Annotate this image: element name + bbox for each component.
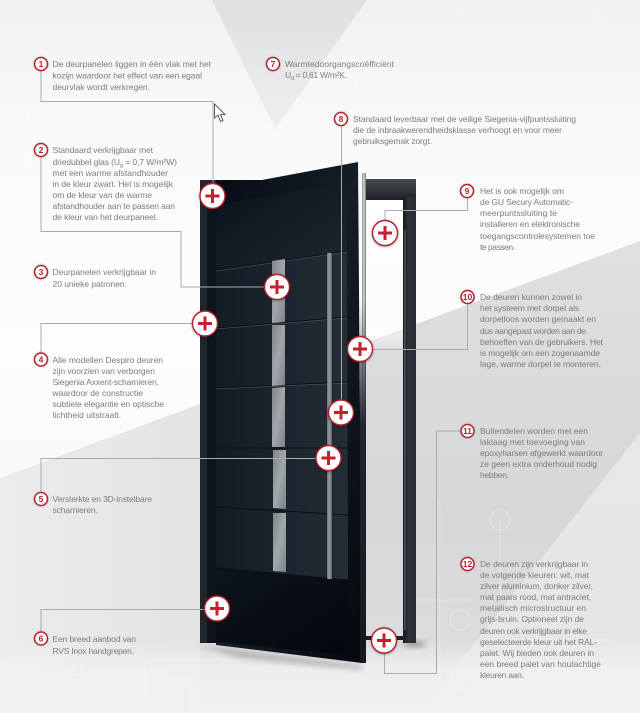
callout 4: Alle modellen Despiro deuren: [52, 355, 163, 365]
callout 12: 12: [463, 559, 472, 569]
plus marker 1: [200, 184, 225, 208]
callout 4: [34, 353, 164, 420]
callout 5: [34, 492, 152, 515]
callout 2: [34, 144, 177, 222]
callout 6: Een breed aanbod van: [52, 634, 136, 644]
glass strips: [272, 259, 286, 572]
callout 4: 4: [39, 354, 44, 364]
door handle: [327, 253, 332, 579]
callout 10: dorpelloos worden gemaakt en: [480, 314, 596, 324]
callout 4: zijn voorzien van verborgen: [52, 366, 155, 376]
callout 7: 7: [271, 59, 276, 69]
callout 8: die de inbraakwerendheidsklasse verhoogt en voor meer: [353, 125, 562, 135]
mouse cursor: [214, 104, 225, 122]
callout 12: deuren ook verkrijgbaar in elke: [480, 626, 587, 636]
callout 7: U: [285, 70, 291, 80]
callout 2: driedubbel glas (U: [52, 157, 120, 167]
callout 9: Het is ook mogelijk om: [480, 186, 564, 196]
callout 10: [461, 290, 604, 369]
callout 4: waardoor de constructie: [52, 388, 143, 398]
callout 2: afstandhouder aan te passen aan: [52, 201, 175, 211]
callout 11: 11: [463, 426, 472, 436]
callout 10: 10: [463, 292, 472, 302]
callout 12: palet. Wij bieden ook deuren in: [480, 648, 594, 658]
callout 3: [34, 266, 156, 289]
callout 1: deurvlak wordt verkregen.: [52, 82, 150, 92]
callout 1: [34, 58, 212, 92]
plus marker 5: [348, 336, 372, 362]
callout 12: mat paars rood, mat antraciet,: [480, 592, 591, 602]
callout 10: lage, warme dorpel te monteren.: [480, 359, 601, 369]
callout 4: lichtheid uitstraalt.: [52, 410, 121, 420]
callout 8: [334, 112, 576, 146]
top door panel: [216, 182, 347, 270]
callout 2: Standaard verkrijgbaar met: [52, 145, 154, 155]
callout 5: Versterkte en 3D-instelbare: [52, 494, 152, 504]
callout 7: d: [291, 76, 294, 82]
callout 12: geselecteerde kleur uit het RAL-: [480, 637, 597, 647]
callout 6: RVS Inox handgrepen.: [52, 646, 134, 656]
callout 12: [461, 558, 601, 680]
callout 5: scharnieren.: [52, 505, 98, 515]
callout 4: Siegenia Axxent-scharnieren,: [52, 377, 159, 387]
callout 3: Deurpanelen verkrijgbaar in: [52, 267, 156, 277]
callout 12: De deuren zijn verkrijgbaar in: [480, 559, 588, 569]
callout 8: gebruiksgemak zorgt.: [353, 136, 432, 146]
callout 9: de GU Secury Automatic-: [480, 197, 573, 207]
callout 8: Standaard leverbaar met de veilige Siegenia-vijfpuntssluiting: [353, 114, 576, 124]
connector lines: [41, 64, 468, 674]
callout 6: [34, 632, 136, 656]
callout 5: 5: [39, 494, 44, 504]
callout 9: installeren en elektronische: [480, 219, 580, 229]
floor shadow: [196, 645, 362, 670]
callout 1: 1: [39, 59, 44, 69]
callout 10: dus aangepast worden aan de: [480, 326, 586, 336]
callout 2: in de kleur zwart. Het is mogelijk: [52, 179, 174, 189]
callout 9: [460, 184, 595, 252]
callout 7: = 0,61 W/m²K.: [294, 70, 347, 80]
callout 11: Buitendelen worden met een: [480, 426, 588, 436]
callout 9: toegangscontrolesystemen toe: [480, 231, 595, 241]
plus marker 9: [372, 628, 396, 653]
callout 2: de kleur van het deurpaneel.: [52, 212, 158, 222]
plus marker 8: [204, 596, 230, 621]
callout 1: De deurpanelen liggen in één vlak met het: [52, 59, 212, 69]
callout 10: het systeem met dorpel als: [480, 303, 579, 313]
door frame: [362, 179, 426, 646]
callout 10: behoeften van de gebruikers. Het: [480, 337, 604, 347]
door grooves: [216, 251, 348, 580]
callout 9: 9: [465, 186, 470, 196]
plus marker 2: [264, 274, 290, 300]
callout 11: epoxyharsen afgewerkt waardoor: [480, 448, 603, 458]
callout 2: g: [120, 163, 123, 169]
callout 12: zilver aluminium, donker zilver,: [480, 581, 593, 591]
callout 12: een breed palet van houtachtige: [480, 659, 601, 669]
callout 11: laklaag met toevoeging van: [480, 437, 585, 447]
callout 11: [461, 424, 603, 480]
callout 9: te passen.: [480, 242, 515, 252]
plus marker 7: [316, 446, 341, 470]
bottom door panel: [216, 568, 349, 655]
callout 2: om de kleur van de warme: [52, 190, 152, 200]
callout 2: met een warme afstandhouder: [52, 168, 168, 178]
callout 12: kleuren aan.: [480, 670, 524, 680]
callout 11: hebben.: [480, 470, 509, 480]
callout 10: De deuren kunnen zowel in: [480, 292, 582, 302]
callout 1: kozijn waardoor het effect van een egaal: [52, 70, 202, 80]
plus marker 4: [372, 220, 398, 246]
callout 7: [266, 58, 395, 82]
plus marker 3: [192, 311, 218, 336]
callout 2: = 0,7 W/m²W): [123, 157, 177, 167]
callout 4: subtiele elegantie en optische: [52, 399, 164, 409]
callout 6: 6: [39, 634, 44, 644]
callout 10: is mogelijk om een zogenaamde: [480, 348, 600, 358]
callout 2: 2: [39, 145, 44, 155]
door leaf: [200, 162, 366, 663]
middle door panels: [216, 251, 348, 580]
callout 11: ze geen extra onderhoud nodig: [480, 459, 597, 469]
callout 12: de volgende kleuren: wit, mat: [480, 570, 590, 580]
callout 8: 8: [339, 114, 344, 124]
callout 12: grijs-bruin. Optioneel zijn de: [480, 614, 584, 624]
callout 3: 3: [39, 267, 44, 277]
callout 7: Warmtedoorgangscoëfficiënt: [285, 59, 395, 69]
callout 9: meerpuntssluiting te: [480, 208, 557, 218]
callout 3: 20 unieke patronen.: [52, 279, 127, 289]
callout 12: metallisch microstructuur en: [480, 603, 586, 613]
plus marker 6: [328, 400, 354, 425]
